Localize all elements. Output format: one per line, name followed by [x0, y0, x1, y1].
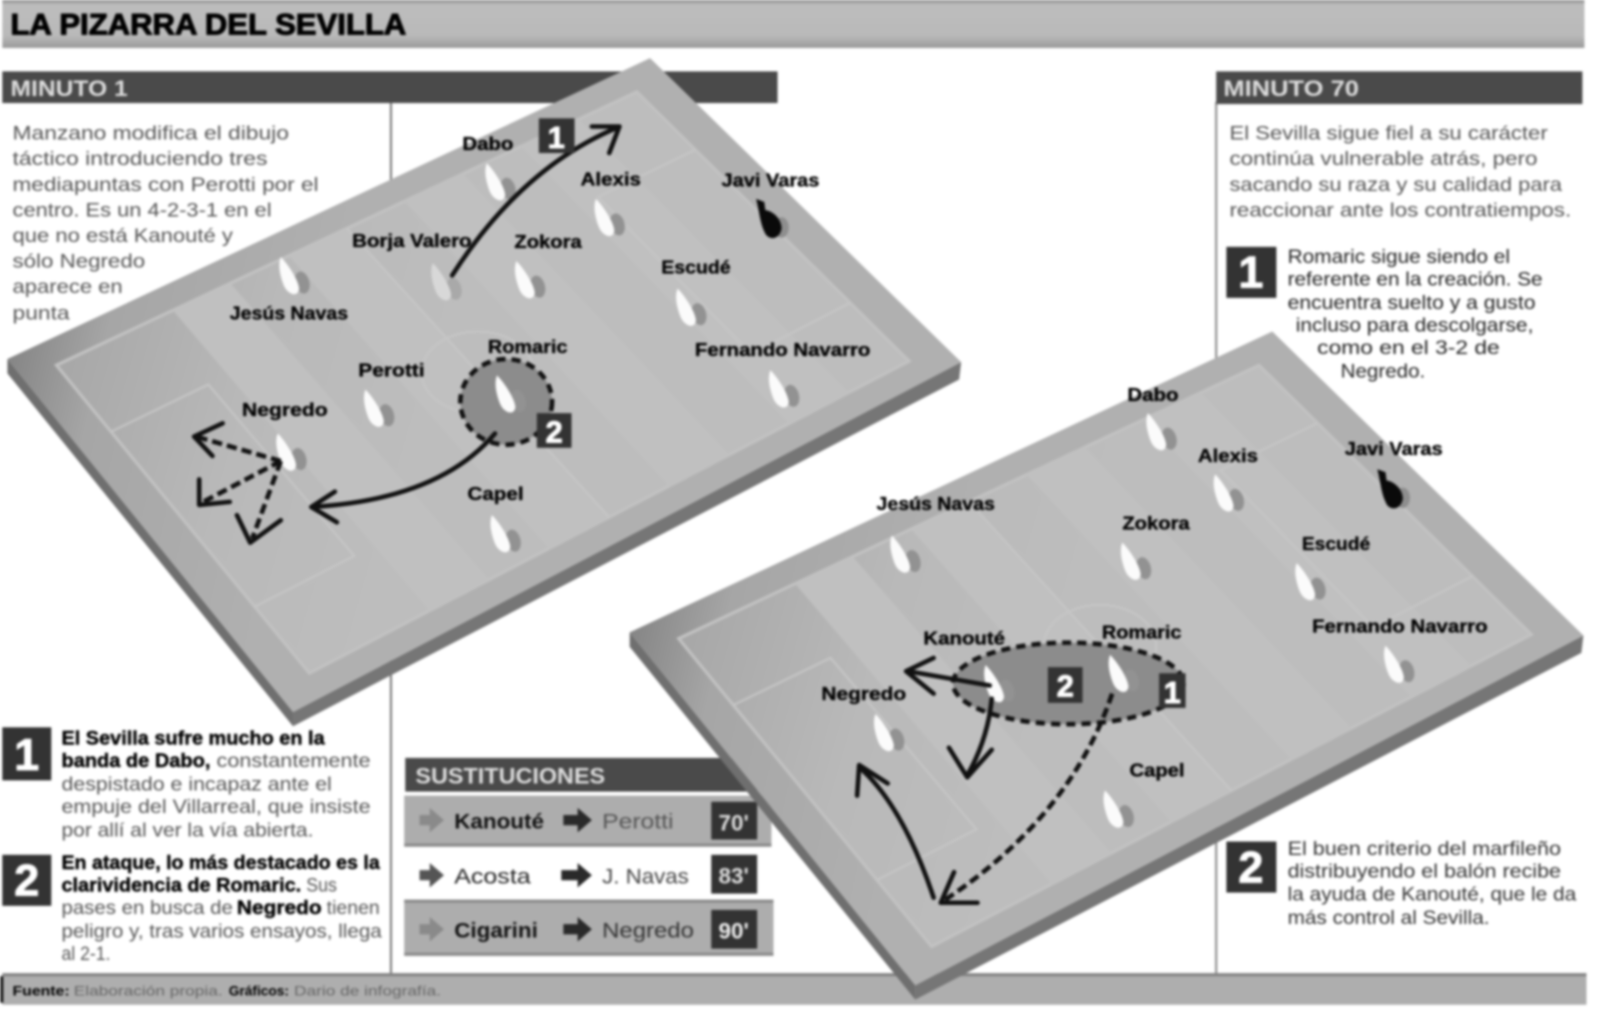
player: Alexis: [1198, 445, 1258, 513]
note 2: minuto 70: El buen criterio del marfileño: [1288, 838, 1561, 860]
text block: minuto 70 intro: sacando su raza y su calidad para: [1229, 174, 1562, 196]
player: Dabo: [1127, 384, 1179, 451]
note 1: minuto 1: empuje del Villarreal, que insiste: [61, 796, 371, 818]
player: Jesus Navas: [877, 493, 995, 574]
badge 1: 1: [548, 121, 565, 155]
footer band: credits: Elaboración propia.: [74, 984, 223, 1000]
note 2: minuto 70: 2: [1238, 841, 1263, 892]
player: Zokora: [514, 231, 583, 299]
badge 2: [1048, 667, 1083, 704]
badge 2: [537, 413, 572, 450]
player: Perotti: [358, 359, 425, 428]
arrow: run to Negredo: [857, 765, 934, 898]
player: Javi Varas: [721, 170, 819, 238]
badge 1: [1159, 673, 1186, 710]
note 1: minuto 1: [2, 727, 371, 841]
player: Romaric: [1102, 622, 1182, 693]
player: Negredo: [242, 399, 328, 472]
arrow: Romaric pass: [311, 434, 495, 522]
arrow: Kanoute forward: [906, 658, 990, 694]
player: Escude: Escudé: [661, 256, 731, 277]
text block: minuto 1 intro: táctico introduciendo tres: [13, 148, 268, 170]
column divider right: [1215, 102, 1217, 975]
footer band: credits: Dario de infografía.: [294, 984, 441, 1000]
player: Romaric: [488, 336, 567, 414]
note 1: minuto 70: referente en la creación. Se: [1288, 269, 1543, 291]
note 2: minuto 70: la ayuda de Kanouté, que le da: [1288, 884, 1576, 906]
text block: minuto 1 intro: Manzano modifica el dibujo: [13, 123, 289, 145]
note 1: minuto 70: Negredo.: [1341, 360, 1425, 382]
panel: sustituciones: Acosta: [454, 864, 531, 888]
footer band: credits: [0, 973, 1586, 1005]
player: Zokora: Zokora: [1122, 512, 1191, 533]
panel: sustituciones: 83': [719, 863, 749, 888]
player: Fernando Navarro: Fernando Navarro: [695, 339, 870, 360]
badge 2: 2: [1057, 670, 1074, 704]
player: Dabo: [462, 133, 518, 201]
note 2: minuto 1: clarividencia de Romaric.: [61, 875, 301, 897]
text block: minuto 1 intro: punta: [13, 302, 70, 324]
highlight circle: Romaric: [460, 359, 552, 445]
note 2: minuto 1: pases en busca de: [61, 897, 233, 919]
player: Escude: Escudé: [1302, 533, 1370, 554]
text block: minuto 70 intro: reaccionar ante los contratiempos.: [1229, 199, 1571, 221]
note 1: minuto 1: por allí al ver la vía abierta.: [61, 819, 313, 841]
note 1: minuto 70: como en el 3-2 de: [1317, 337, 1500, 359]
player: Capel: [467, 483, 524, 553]
panel: sustituciones: Negredo: [602, 918, 694, 942]
player: Capel: Capel: [467, 483, 524, 504]
text block: minuto 1 intro: que no está Kanouté y: [13, 225, 233, 247]
player: Capel: [1104, 759, 1185, 829]
text block: minuto 1 intro: [13, 123, 319, 324]
player: Kanoute: Kanouté: [923, 628, 1005, 649]
panel: sustituciones: Perotti: [602, 809, 674, 833]
text block: minuto 1 intro: mediapuntas con Perotti por el: [13, 174, 319, 196]
note 1: minuto 1: 1: [14, 729, 39, 780]
note 2: minuto 1: Sus: [306, 875, 337, 897]
note 1: minuto 1: despistado e incapaz ante el: [61, 774, 332, 796]
player: Fernando Navarro: Fernando Navarro: [1312, 615, 1488, 636]
player: Javi Varas: Javi Varas: [721, 170, 819, 191]
player: Negredo: [821, 683, 907, 752]
panel: sustituciones: [404, 758, 773, 956]
note 2: minuto 70: [1226, 838, 1576, 929]
note 2: minuto 1: tienen: [327, 897, 380, 919]
player: Capel: Capel: [1129, 759, 1185, 780]
text block: minuto 1 intro: centro. Es un 4-2-3-1 en el: [13, 199, 272, 221]
player: Perotti: Perotti: [358, 359, 425, 380]
text block: minuto 70 intro: El Sevilla sigue fiel a su carácter: [1229, 123, 1548, 145]
player: Javi Varas: [1345, 438, 1443, 508]
heading bar: minuto 1: [2, 71, 778, 103]
player: Alexis: [581, 169, 641, 237]
panel: pitch minuto 70: [630, 332, 1583, 1000]
panel: sustituciones: 70': [719, 810, 749, 835]
text block: minuto 1 intro: sólo Negredo: [13, 250, 145, 272]
player: Borja Valero: [352, 230, 472, 301]
panel: sustituciones: J. Navas: [602, 864, 689, 888]
note 2: minuto 1: Negredo: [237, 897, 322, 919]
player: Alexis: Alexis: [1198, 445, 1258, 466]
note 1: minuto 70: [1226, 246, 1543, 382]
note 2: minuto 1: peligro y, tras varios ensayos, llega: [61, 920, 382, 942]
badge 1: 1: [1164, 676, 1181, 710]
note 1: minuto 1: banda de Dabo,: [61, 750, 210, 772]
text block: minuto 1 intro: aparece en: [13, 276, 123, 298]
player: Fernando Navarro: [695, 339, 870, 408]
heading bar: minuto 1: MINUTO 1: [10, 76, 128, 101]
panel: sustituciones: Cigarini: [454, 918, 538, 942]
note 2: minuto 70: distribuyendo el balón recibe: [1288, 860, 1561, 882]
note 2: minuto 1: al 2-1.: [61, 943, 110, 965]
note 1: minuto 70: Romaric sigue siendo el: [1288, 246, 1510, 268]
note 1: minuto 70: 1: [1238, 247, 1263, 298]
note 2: minuto 1: 2: [14, 855, 39, 906]
note 1: minuto 1: El Sevilla sufre mucho en la: [61, 728, 325, 750]
text block: minuto 70 intro: [1229, 123, 1571, 221]
player: Dabo: Dabo: [1127, 384, 1178, 405]
player: Alexis: Alexis: [581, 169, 641, 190]
player: Javi Varas: Javi Varas: [1345, 438, 1443, 459]
text block: minuto 70 intro: continúa vulnerable atrás, pero: [1229, 148, 1538, 170]
player: Jesus Navas: Jesús Navas: [230, 302, 348, 323]
player: Jesus Navas: Jesús Navas: [877, 493, 995, 514]
player: Negredo: Negredo: [242, 399, 328, 420]
column divider left: [390, 102, 392, 975]
note 1: minuto 70: incluso para descolgarse,: [1296, 315, 1533, 337]
player: Zokora: [1121, 512, 1191, 581]
player: Negredo: Negredo: [821, 683, 906, 704]
footer band: credits: Gráficos:: [229, 984, 289, 1000]
player: Zokora: Zokora: [514, 231, 583, 252]
arrow: Kanoute drop: [949, 699, 992, 777]
title: LA PIZARRA DEL SEVILLA: [10, 9, 406, 42]
panel: sustituciones: SUSTITUCIONES: [415, 763, 605, 788]
heading bar: minuto 70: [1216, 71, 1582, 104]
note 2: minuto 70: más control al Sevilla.: [1288, 907, 1490, 929]
player: Escude: [661, 256, 731, 327]
player: Dabo: Dabo: [462, 133, 513, 154]
panel: sustituciones: 90': [719, 918, 749, 943]
highlight ellipse: Kanoute and Romaric: [953, 643, 1184, 724]
title band: [2, 0, 1584, 48]
note 1: minuto 70: encuentra suelto y a gusto: [1288, 292, 1535, 314]
footer band: credits: Fuente:: [13, 984, 70, 1000]
player: Fernando Navarro: [1312, 615, 1488, 684]
player: Borja Valero: Borja Valero: [352, 230, 472, 251]
player: Romaric: Romaric: [488, 336, 567, 357]
arrow: run down the wing: [452, 126, 619, 275]
heading bar: minuto 70: MINUTO 70: [1223, 76, 1359, 101]
badge 2: 2: [546, 416, 563, 450]
arrow: dashed pass: [941, 694, 1112, 903]
player: Jesus Navas: [230, 257, 348, 323]
note 2: minuto 1: [2, 852, 382, 965]
note 1: minuto 1: constantemente: [217, 750, 371, 772]
badge 1: [539, 118, 575, 155]
arrows: Negredo dashed movements: [194, 423, 281, 543]
panel: sustituciones: Kanouté: [454, 809, 544, 833]
panel: pitch minuto 1: [7, 58, 961, 726]
note 2: minuto 1: En ataque, lo más destacado es la: [61, 852, 380, 874]
player: Romaric: Romaric: [1102, 622, 1182, 643]
player: Escude: [1295, 533, 1370, 601]
player: Kanoute: [923, 628, 1017, 703]
